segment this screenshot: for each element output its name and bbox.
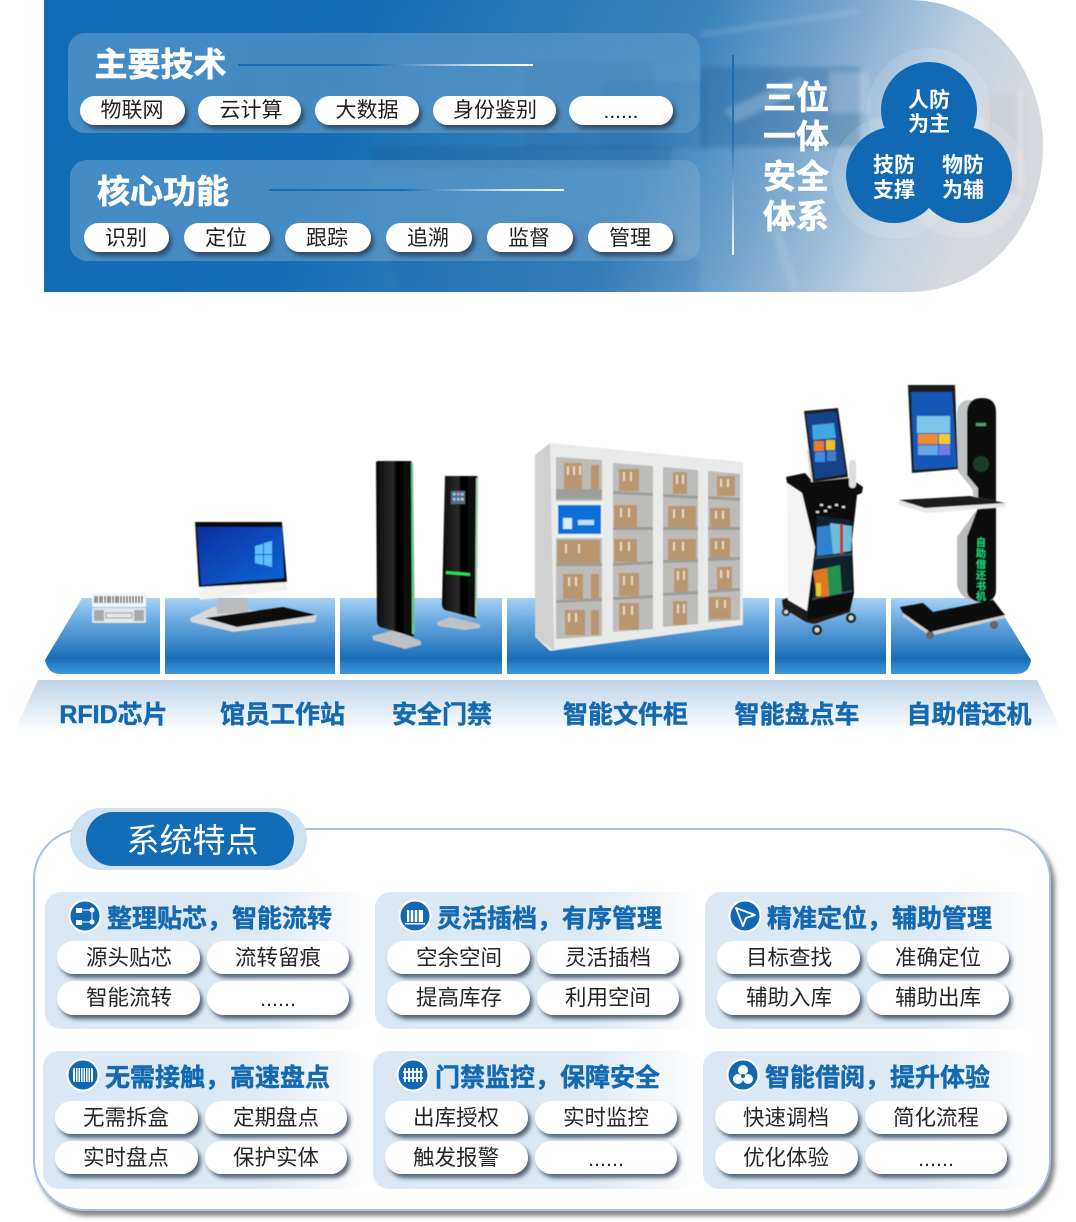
chip: 辅助出库 (895, 986, 981, 1010)
chip: 定期盘点 (233, 1106, 319, 1130)
card title: 门禁监控，保障安全 (435, 1064, 660, 1092)
label: physical defence: 为辅 (942, 178, 984, 202)
chip: big data: 大数据 (336, 99, 398, 122)
chip (385, 1141, 528, 1174)
chip (55, 1101, 198, 1134)
kiosk vertical label: 借 (976, 558, 986, 571)
chip: 流转留痕 (235, 946, 321, 970)
kiosk vertical label (976, 536, 986, 603)
panel: main technologies (68, 33, 700, 133)
card: smart borrowing (703, 1051, 1033, 1189)
chip: 简化流程 (893, 1106, 979, 1130)
chip: 保护实体 (233, 1146, 319, 1170)
kiosk vertical label: 机 (976, 590, 986, 603)
kiosk vertical label: 书 (976, 580, 986, 593)
chip: more (569, 96, 673, 125)
chip: 快速调档 (743, 1106, 829, 1130)
card title: 智能借阅，提升体验 (765, 1064, 990, 1092)
chip: 无需拆盒 (83, 1106, 169, 1130)
panel: core functions (70, 160, 700, 261)
card title: 无需接触，高速盘点 (105, 1064, 330, 1092)
chip: ...... (588, 1147, 624, 1171)
chip: ...... (260, 987, 296, 1011)
device: security gates (372, 461, 480, 649)
chip: supervise (487, 223, 573, 252)
heading rule (238, 64, 533, 66)
icon: three circles (728, 1060, 758, 1090)
chip: 目标查找 (746, 946, 832, 970)
chip (715, 1101, 858, 1134)
icon: shelves (400, 900, 430, 932)
chip (55, 1141, 198, 1174)
icon: barcode (68, 1060, 98, 1090)
label: physical defence: 物防 (942, 154, 984, 177)
card: access monitoring (373, 1051, 698, 1189)
chip (535, 1141, 677, 1174)
chip: big data (315, 96, 419, 125)
label band (14, 680, 1062, 732)
device: smart inventory cart (782, 408, 863, 635)
chip (387, 941, 530, 974)
chip (867, 981, 1009, 1015)
card title: 灵活插档，有序管理 (437, 905, 662, 933)
heading: three in one security system: 体系 (763, 198, 829, 235)
kiosk vertical label: 还 (976, 570, 986, 582)
chip: identity: 身份鉴别 (453, 99, 537, 122)
chip: track (285, 223, 371, 252)
chip: 准确定位 (895, 946, 981, 970)
icon: navigation arrow (730, 900, 760, 932)
chip: trace (386, 223, 472, 252)
label: RFID chip: RFID芯片 (59, 701, 168, 729)
label: smart cabinet: 智能文件柜 (563, 701, 688, 729)
device: smart file cabinet (535, 443, 743, 651)
heading: three in one security system (763, 79, 829, 235)
title pill: system features: 系统特点 (126, 822, 258, 859)
chip: 辅助入库 (746, 986, 832, 1010)
chip: locate (184, 223, 270, 252)
chip: IoT (80, 96, 185, 125)
chip (717, 981, 860, 1015)
chip (57, 981, 200, 1015)
kiosk vertical label: 自 (976, 536, 986, 549)
chip (867, 941, 1009, 974)
label: security gate: 安全门禁 (392, 701, 492, 729)
chip (715, 1141, 858, 1174)
banner: technology and functions (44, 0, 1043, 292)
vertical divider (732, 55, 734, 255)
icon: gate fence (398, 1060, 428, 1090)
label: technical defence: 支撑 (873, 179, 915, 202)
label: librarian workstation: 馆员工作站 (220, 701, 345, 729)
chip (717, 941, 860, 974)
chip: identify: 识别 (105, 227, 147, 250)
heading rule (269, 189, 564, 191)
heading: three in one security system: 安全 (763, 158, 829, 195)
label: technical defence (873, 154, 915, 202)
chip: 实时盘点 (83, 1146, 169, 1170)
heading: three in one security system: 一体 (763, 118, 829, 155)
diagram: three overlapping circles (832, 48, 1026, 239)
chip (57, 941, 200, 974)
card: tagging and circulation (45, 892, 370, 1029)
platform: segmented blue stage (45, 598, 1031, 674)
label: technical defence: 技防 (873, 154, 915, 177)
chip: track: 跟踪 (306, 227, 348, 250)
card: contactless inventory (43, 1051, 368, 1189)
kiosk vertical label: 助 (976, 547, 986, 560)
panel: system features (34, 808, 1050, 1210)
chip: 利用空间 (565, 986, 651, 1010)
card title: 精准定位，辅助管理 (767, 904, 992, 933)
heading: three in one security system: 三位 (763, 79, 829, 116)
heading: core functions: 核心功能 (97, 173, 229, 210)
card title: 整理贴芯，智能流转 (107, 905, 332, 933)
chip (535, 1101, 677, 1134)
chip: 实时监控 (563, 1106, 649, 1130)
label: human defence: 为主 (908, 113, 950, 136)
chip: IoT: 物联网 (100, 99, 164, 122)
title pill: system features (70, 808, 307, 870)
chip: 空余空间 (416, 946, 502, 970)
card: accurate location (705, 892, 1035, 1029)
chip (205, 1101, 347, 1134)
chip: identify (84, 223, 169, 252)
label: human defence: 人防 (908, 89, 950, 112)
icon: flow nodes (70, 900, 100, 932)
chip (865, 1101, 1007, 1134)
chip (207, 981, 349, 1015)
card: flexible filing (375, 892, 700, 1029)
chip: 灵活插档 (565, 946, 651, 970)
chip (537, 941, 679, 974)
label: inventory cart: 智能盘点车 (734, 701, 860, 729)
chip: manage (588, 223, 673, 252)
device: self-service kiosk (899, 385, 1005, 639)
device: librarian workstation (190, 522, 317, 632)
chip: trace: 追溯 (407, 227, 449, 250)
chip (537, 981, 679, 1015)
device: RFID chip (92, 593, 146, 623)
heading: main technologies: 主要技术 (94, 46, 226, 83)
chip: identity (433, 96, 556, 125)
chip: supervise: 监督 (508, 227, 550, 250)
chip: 提高库存 (416, 986, 502, 1010)
chip: 智能流转 (86, 986, 172, 1010)
chip (387, 981, 530, 1015)
chip: 源头贴芯 (86, 946, 172, 970)
chip: 出库授权 (413, 1106, 499, 1130)
chip (865, 1141, 1007, 1174)
label: self-service kiosk: 自助借还机 (906, 701, 1032, 729)
chip (205, 1141, 347, 1174)
chip: cloud computing: 云计算 (220, 99, 282, 122)
chip: locate: 定位 (205, 227, 247, 250)
label: human defence (908, 89, 950, 136)
chip: ...... (918, 1147, 954, 1171)
chip: 触发报警 (413, 1146, 499, 1170)
chip: more: ...... (603, 100, 639, 123)
chip: cloud computing (198, 96, 301, 125)
chip: manage: 管理 (609, 227, 651, 250)
chip: 优化体验 (743, 1146, 829, 1170)
label: physical defence (942, 154, 984, 202)
chip (385, 1101, 528, 1134)
chip (207, 941, 349, 974)
